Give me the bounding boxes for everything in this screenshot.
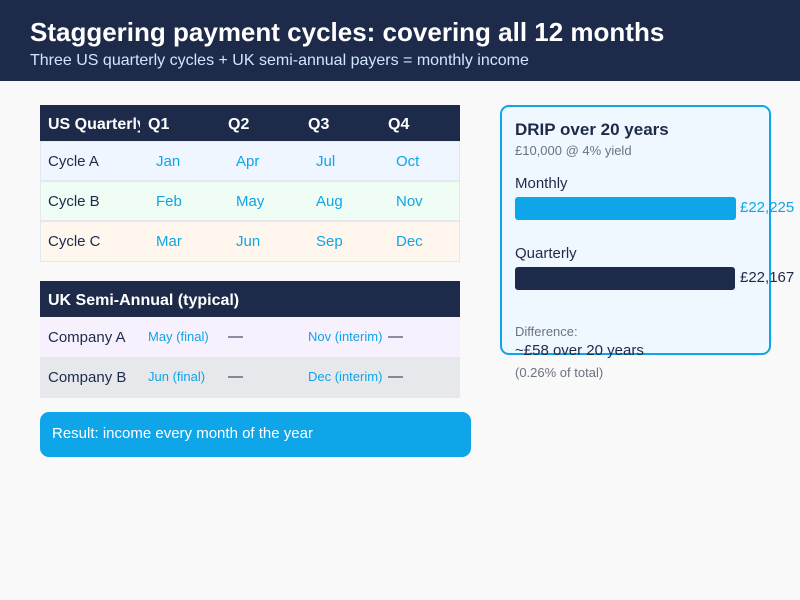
bar: monthly: £22,225 [740,199,794,216]
table: UK semi-annual: UK Semi-Annual (typical) [48,292,239,309]
result callout: Result: income every month of the year [52,425,313,442]
bar: monthly [515,175,794,220]
table: US quarterly cycles: Q1 [148,116,169,133]
table: UK semi-annual: — [228,328,243,345]
table: UK semi-annual: — [388,328,403,345]
difference note: (0.26% of total) [515,365,603,380]
table: US quarterly cycles: Aug [316,193,343,210]
panel heading: DRIP over 20 years [515,120,669,139]
table: US quarterly cycles: Jun [236,233,260,250]
subtitle: Three US quarterly cycles + UK semi-annual payers = monthly income [30,52,529,69]
bar: quarterly [515,245,794,290]
header band [0,0,800,81]
bar: monthly: Monthly [515,175,568,192]
title: Staggering payment cycles: covering all 12 months [30,17,664,47]
table: US quarterly cycles: Sep [316,233,343,250]
table: UK semi-annual: Company A [48,329,126,346]
table: US quarterly cycles: Apr [236,153,259,170]
table: US quarterly cycles: Q4 [388,116,409,133]
table: UK semi-annual: Company B [48,369,126,386]
table: US quarterly cycles [40,105,460,262]
table: UK semi-annual: Jun (final) [148,369,205,384]
table: US quarterly cycles: Cycle A [48,153,99,170]
table: US quarterly cycles: Cycle C [48,233,101,250]
table: UK semi-annual: — [228,368,243,385]
difference note: ~£58 over 20 years [515,342,644,359]
table: US quarterly cycles: Cycle B [48,193,100,210]
table: US quarterly cycles: Q3 [308,116,329,133]
table: US quarterly cycles: Nov [396,193,423,210]
table: US quarterly cycles: Jan [156,153,180,170]
text: £10,000 @ 4% yield [515,143,632,158]
table: US quarterly cycles: Jul [316,153,335,170]
table: UK semi-annual: Dec (interim) [308,369,382,384]
table: UK semi-annual: May (final) [148,329,209,344]
table: UK semi-annual [40,281,460,398]
table: US quarterly cycles: Feb [156,193,182,210]
table: UK semi-annual: Nov (interim) [308,329,382,344]
table: US quarterly cycles: Mar [156,233,182,250]
table: US quarterly cycles: May [236,193,264,210]
difference note [515,324,644,380]
result callout [40,412,471,457]
table: US quarterly cycles: Q2 [228,116,249,133]
table: UK semi-annual: — [388,368,403,385]
difference note: Difference: [515,324,578,339]
panel: DRIP comparison [500,105,771,355]
bar: quarterly: £22,167 [740,269,794,286]
bar: quarterly: Quarterly [515,245,577,262]
table: US quarterly cycles: Oct [396,153,419,170]
table: US quarterly cycles: Dec [396,233,423,250]
